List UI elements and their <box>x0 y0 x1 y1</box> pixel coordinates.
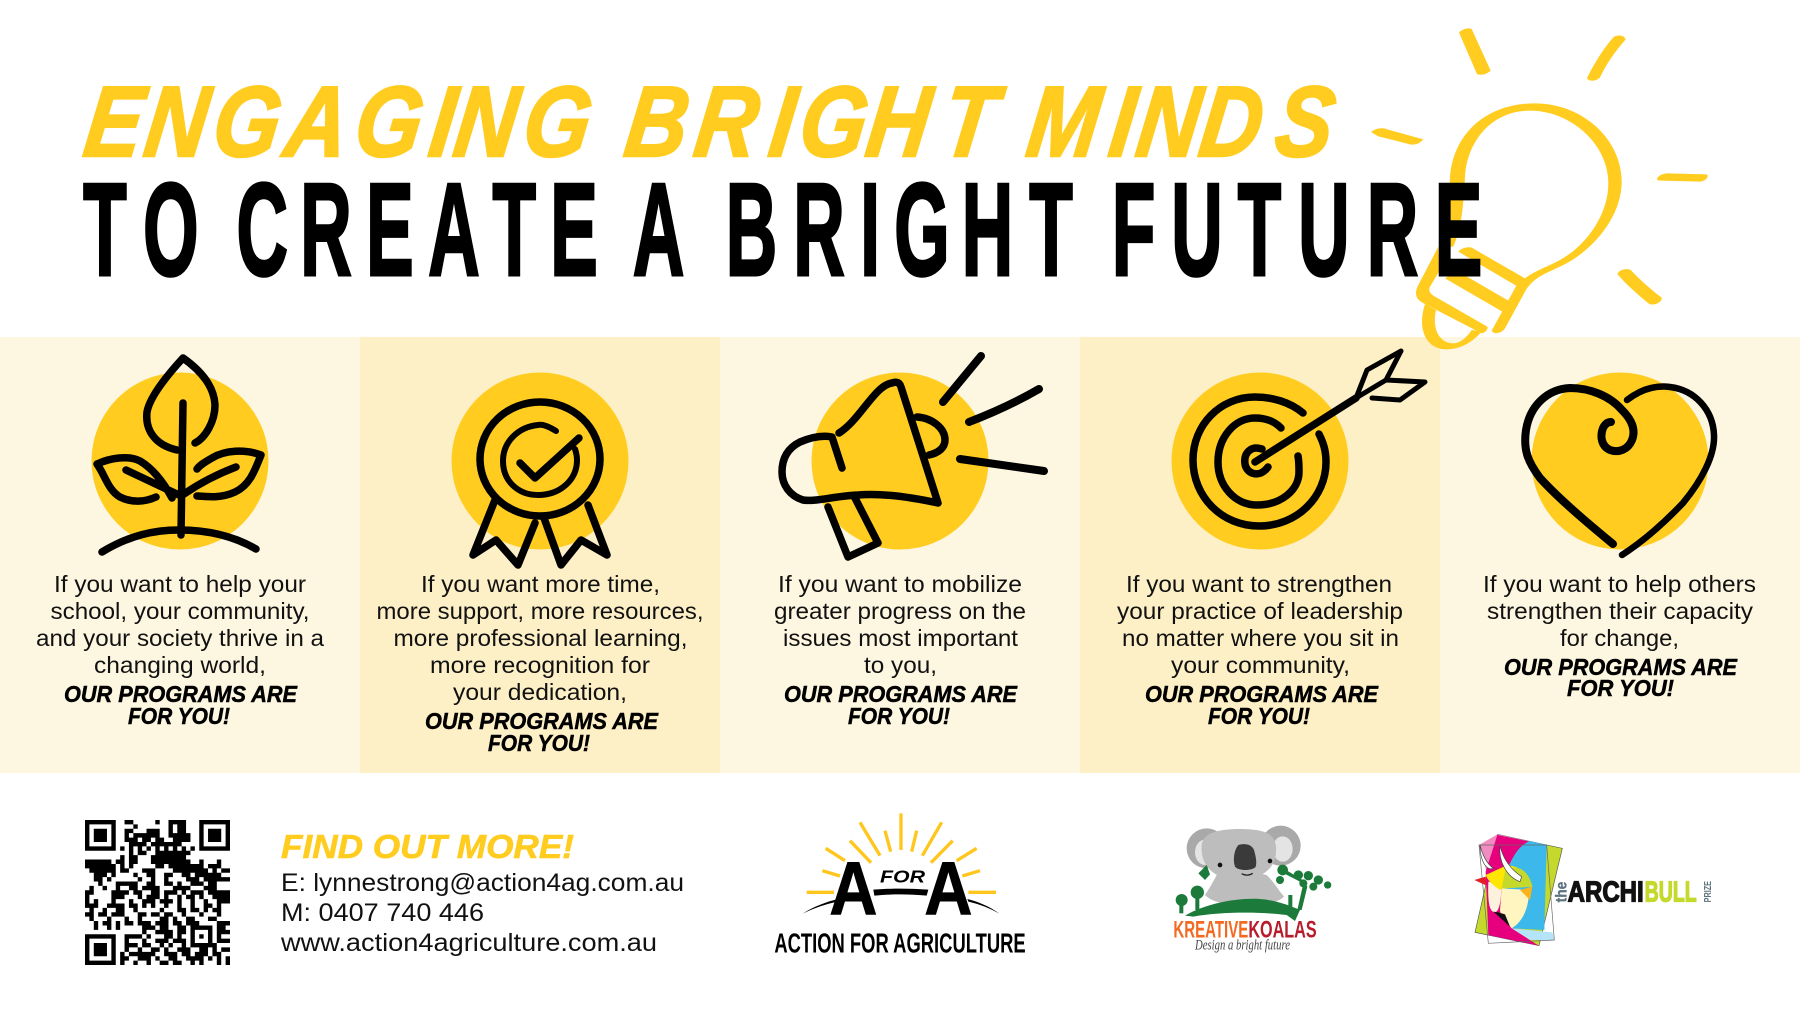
text block: and your society thrive in a <box>36 625 324 651</box>
tagline: OUR PROGRAMS ARE <box>425 708 659 734</box>
text block: strengthen their capacity <box>1487 598 1754 624</box>
icon: target with arrow <box>1193 351 1425 526</box>
text block: If you want to help others <box>1483 571 1756 597</box>
contact details: www.action4agriculture.com.au <box>280 929 657 957</box>
tagline: FOR YOU! <box>488 730 590 756</box>
contact block <box>280 828 684 957</box>
tagline <box>425 708 659 756</box>
logo: Kreative Koalas: Design a bright future <box>1194 937 1290 953</box>
icon: yellow circle behind plant <box>92 372 268 550</box>
text block: changing world, <box>94 652 266 678</box>
QR code <box>85 822 230 963</box>
text block: If you want more time, <box>421 571 660 597</box>
panel: mobilize progress <box>774 356 1044 729</box>
logo: Action for Agriculture: A <box>924 846 972 930</box>
icon: yellow circle behind target <box>1172 372 1348 550</box>
title line 2: TO CREATE A BRIGHT FUTURE <box>83 157 1482 304</box>
logo: The Archibull Prize: the <box>1553 882 1570 902</box>
text block: for change, <box>1560 625 1679 651</box>
contact details: E: lynnestrong@action4ag.com.au <box>281 869 684 897</box>
text block: more recognition for <box>430 652 650 678</box>
tagline <box>1504 654 1738 701</box>
text block: your community, <box>1171 652 1350 678</box>
text block: your dedication, <box>453 679 627 705</box>
text block <box>1483 571 1756 651</box>
panel: practice of leadership <box>1117 351 1425 729</box>
logo: The Archibull Prize <box>1474 834 1714 946</box>
icon: yellow circle behind rosette <box>452 372 628 550</box>
icon: plant <box>97 358 261 552</box>
tagline <box>1145 681 1379 729</box>
logo: The Archibull Prize: PRIZE <box>1703 881 1714 902</box>
tagline <box>784 681 1018 729</box>
text block: greater progress on the <box>774 598 1026 624</box>
panel: help your school <box>36 358 324 729</box>
tagline <box>64 681 298 729</box>
text block: no matter where you sit in <box>1122 625 1399 651</box>
tagline: OUR PROGRAMS ARE <box>64 681 298 707</box>
logo: The Archibull Prize: ARCHI <box>1568 876 1644 908</box>
title line 1: ENGAGING BRIGHT MINDS <box>79 66 1341 177</box>
text block <box>1117 571 1403 678</box>
panel: icon band background <box>0 337 1800 773</box>
logo: The Archibull Prize: BULL <box>1645 876 1697 908</box>
heading: find out more: FIND OUT MORE! <box>281 828 574 865</box>
panel: help others <box>1483 372 1756 701</box>
contact details: M: 0407 740 446 <box>281 899 484 927</box>
contact details <box>280 869 684 957</box>
panel: more time and support <box>376 372 704 756</box>
logo: Kreative Koalas <box>1173 826 1331 953</box>
icon: light bulb with rays <box>1371 28 1708 349</box>
tagline: FOR YOU! <box>1208 703 1310 729</box>
text block: If you want to strengthen <box>1126 571 1392 597</box>
text block: school, your community, <box>50 598 310 624</box>
text block: If you want to help your <box>54 571 306 597</box>
logo: Action for Agriculture <box>774 813 1026 959</box>
text block <box>376 571 704 705</box>
icon: megaphone <box>782 356 1044 557</box>
title <box>79 66 1482 304</box>
text block: If you want to mobilize <box>778 571 1022 597</box>
icon: yellow circle behind heart <box>1532 372 1708 550</box>
logo: Kreative Koalas: KOALAS <box>1248 917 1317 944</box>
tagline: OUR PROGRAMS ARE <box>1504 654 1738 680</box>
text block: your practice of leadership <box>1117 598 1403 624</box>
logo: Action for Agriculture: ACTION FOR AGRICULTURE <box>774 928 1026 959</box>
text block <box>36 571 324 678</box>
tagline: FOR YOU! <box>1567 675 1674 701</box>
logo: Action for Agriculture: A <box>829 846 877 930</box>
tagline: FOR YOU! <box>848 703 950 729</box>
icon: heart <box>1525 387 1714 555</box>
icon: rosette with check <box>473 402 607 565</box>
tagline: OUR PROGRAMS ARE <box>1145 681 1379 707</box>
logo: Kreative Koalas: KREATIVE <box>1173 917 1248 944</box>
text block: more support, more resources, <box>376 598 704 624</box>
tagline: OUR PROGRAMS ARE <box>784 681 1018 707</box>
tagline: FOR YOU! <box>128 703 230 729</box>
text block: issues most important <box>783 625 1019 651</box>
text block: to you, <box>864 652 937 678</box>
icon: yellow circle behind megaphone <box>812 372 988 550</box>
text block <box>774 571 1026 678</box>
text block: more professional learning, <box>394 625 688 651</box>
logo: Action for Agriculture: FOR <box>880 866 926 886</box>
